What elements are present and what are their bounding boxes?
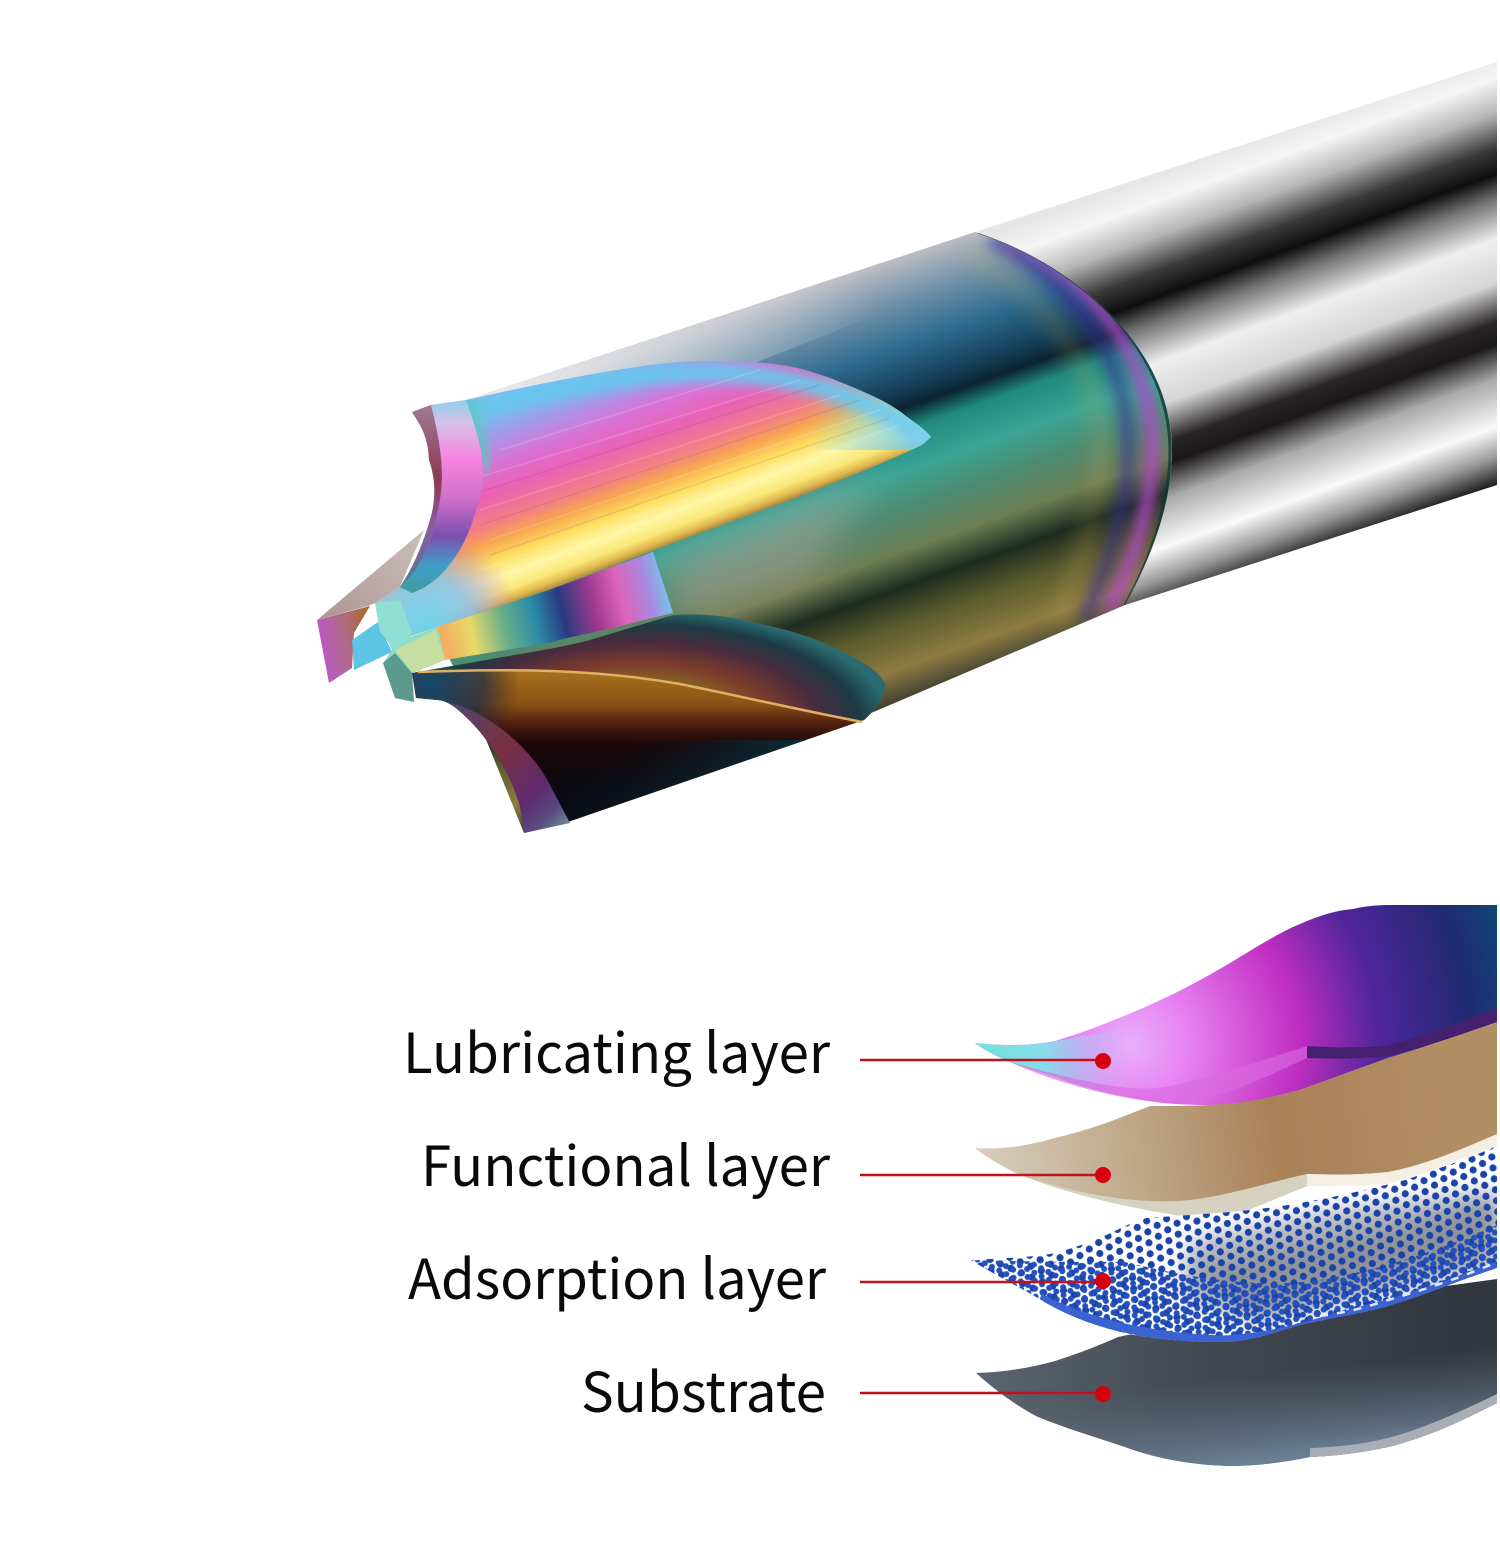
flute edge strip [437, 700, 570, 833]
flute ledge: inner band [400, 400, 483, 593]
layer: functional [975, 1022, 1497, 1216]
layer: substrate [976, 1279, 1497, 1466]
lower flute [412, 614, 885, 833]
tool shank [975, 62, 1497, 605]
functional ledge [1307, 1134, 1497, 1186]
layers stack [965, 905, 1500, 1466]
label: lubricating layer: Lubricating layer [403, 1009, 831, 1089]
label: substrate: Substrate [581, 1348, 826, 1428]
label: adsorption layer [408, 1235, 1111, 1315]
label: functional layer: Functional layer [421, 1122, 831, 1202]
second tooth pillar [437, 552, 673, 660]
pale centre facet [395, 630, 445, 672]
leader line: lubricating [860, 1053, 1111, 1069]
teal centre [375, 600, 412, 650]
label: adsorption layer: Adsorption layer [408, 1235, 827, 1315]
substrate ledge [1310, 1394, 1497, 1457]
label: lubricating layer [403, 1009, 1111, 1089]
flute ledge: outer strip [400, 405, 442, 587]
lower teal facet [383, 653, 414, 702]
cyan tip [352, 622, 392, 670]
leader line: functional [860, 1167, 1111, 1183]
coated tool body [440, 232, 1172, 833]
layer: adsorption atoms [965, 1140, 1500, 1350]
grey wedge [317, 530, 424, 620]
leader line: substrate [860, 1386, 1111, 1402]
rake face with rainbow coating [375, 361, 931, 636]
lubricating ledge [1307, 1008, 1497, 1059]
leader line: adsorption [860, 1273, 1111, 1289]
end mill illustration [317, 62, 1497, 850]
magenta tooth [317, 606, 370, 683]
label: substrate [581, 1348, 1111, 1428]
central point base [375, 603, 445, 702]
upper lens above highlight [426, 614, 886, 721]
layer: lubricating [975, 905, 1497, 1105]
gold highlight curve [418, 670, 862, 722]
label: functional layer [421, 1122, 1111, 1202]
